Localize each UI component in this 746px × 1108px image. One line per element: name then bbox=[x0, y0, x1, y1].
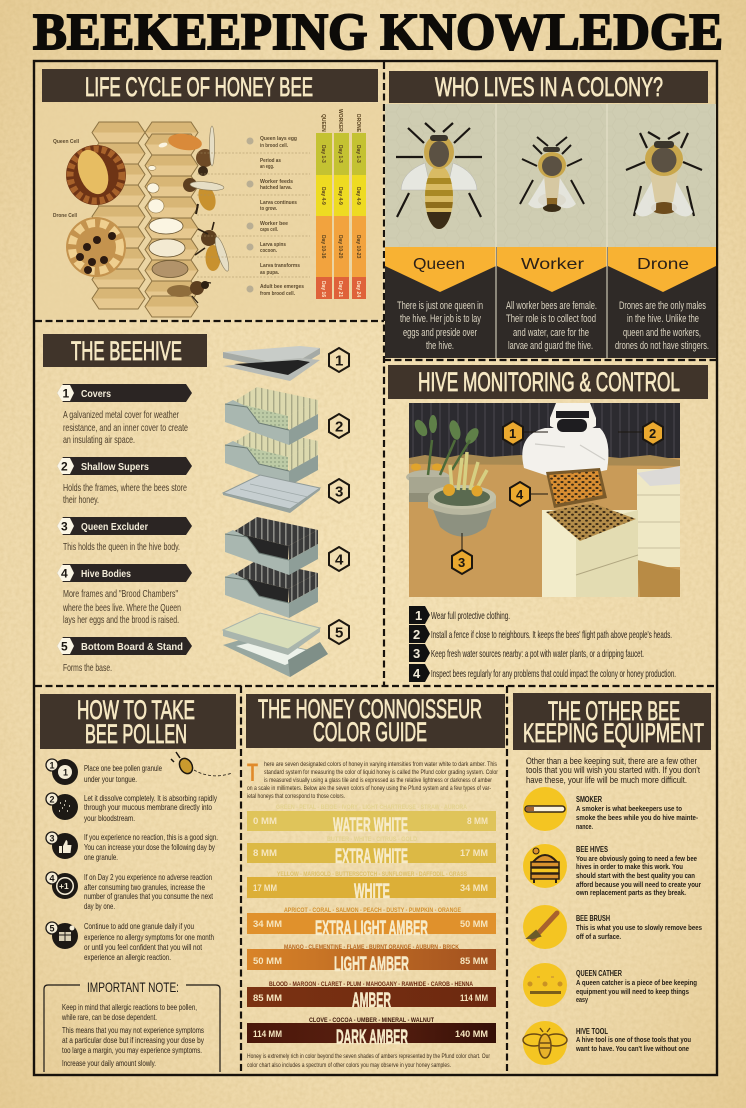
panel: hive monitoring and control bbox=[388, 365, 708, 682]
intro paragraph: T bbox=[247, 759, 258, 787]
band: light amber: LIGHT AMBER bbox=[334, 953, 409, 976]
heading: other equipment bbox=[513, 693, 711, 750]
step 4: day by one. bbox=[84, 901, 115, 911]
hive number badges: 4 bbox=[335, 552, 344, 568]
step 4: If on Day 2 you experience no adverse reaction bbox=[84, 872, 212, 882]
item: bee hives: should start with the best quality you can bbox=[576, 871, 695, 880]
band: amber: AMBER bbox=[352, 989, 391, 1012]
step 1 bbox=[46, 759, 162, 785]
item: bee hives: own replacement parts as they break. bbox=[576, 888, 686, 897]
step 2: 2 bbox=[413, 627, 420, 642]
footnote: color chart also includes a spectrum of other colors you may observe in your honey samples. bbox=[247, 1062, 451, 1069]
important note box: at a particular dose but if increasing your dose by bbox=[62, 1035, 205, 1045]
timeline bars: DRONE bbox=[355, 114, 361, 133]
band: dark amber: 114 MM bbox=[253, 1029, 282, 1040]
timeline bars: QUEEN bbox=[320, 114, 326, 132]
footnote: Honey is extremely rich in color beyond the seven shades of ambers represented by the Pfund color chart. Our bbox=[247, 1053, 491, 1060]
item: bottom board and stand bbox=[57, 637, 192, 674]
caption: drone: Drones are the only males bbox=[619, 300, 706, 312]
item: covers: A galvanized metal cover for weather bbox=[63, 409, 179, 421]
stages list: in brood cell. bbox=[260, 143, 288, 149]
band: amber: 85 MM bbox=[253, 993, 282, 1004]
icon: flying bee bbox=[171, 752, 232, 776]
important note box: while rare, can be dose dependent. bbox=[61, 1012, 157, 1022]
band: extra white: EXTRA WHITE bbox=[335, 845, 408, 868]
step 3 bbox=[409, 644, 644, 662]
item: queen excluder: 3 bbox=[61, 520, 68, 534]
item: bee hives: You are obviously going to need a few bee bbox=[576, 854, 697, 863]
caption: queen bbox=[397, 256, 483, 352]
band: amber: BLOOD - MAROON - CLARET - PLUM - MAHOGANY - RAWHIDE - CAROB - HENNA bbox=[269, 981, 473, 988]
band: dark amber: 140 MM bbox=[455, 1029, 488, 1040]
step 2 bbox=[46, 793, 218, 823]
step 3: You can increase your dose the following day by bbox=[84, 842, 215, 852]
badge 1 bbox=[503, 421, 548, 445]
step 5: experience an allergic reaction. bbox=[84, 952, 171, 962]
timeline bars: Day 1-3 bbox=[337, 145, 343, 163]
item: covers bbox=[57, 384, 192, 446]
timeline bars: Day 10-20 bbox=[337, 235, 343, 259]
stages list: as pupa. bbox=[260, 270, 279, 276]
band: white: WHITE bbox=[354, 880, 390, 903]
timeline bars: Day 16 bbox=[320, 281, 326, 297]
badge 3 bbox=[452, 533, 472, 574]
timeline bars: Day 24 bbox=[355, 281, 361, 297]
step 3 bbox=[46, 832, 218, 862]
item: shallow supers: Shallow Supers bbox=[81, 462, 149, 473]
stages list: to grow. bbox=[260, 206, 277, 212]
step 1: under your tongue. bbox=[84, 774, 137, 784]
caption: worker: Their role is to collect food bbox=[506, 313, 596, 325]
timeline bars: Day 1-3 bbox=[355, 145, 361, 163]
hive number badges: 2 bbox=[335, 418, 343, 436]
step 5: Continue to add one granule daily if you bbox=[84, 921, 194, 931]
important note box: IMPORTANT NOTE: bbox=[87, 979, 179, 995]
item: covers: Covers bbox=[81, 389, 111, 400]
caption: drone: Drone bbox=[637, 256, 689, 273]
item: bottom board and stand: Bottom Board & Stand bbox=[81, 642, 183, 653]
step 2: your bloodstream. bbox=[84, 813, 135, 823]
step 2: 2 bbox=[50, 794, 55, 804]
heading: life cycle: LIFE CYCLE OF HONEY BEE bbox=[85, 72, 313, 102]
beekeeper bbox=[522, 403, 608, 480]
item: shallow supers: Holds the frames, where the bees store bbox=[63, 482, 187, 494]
intro text: Other than a bee keeping suit, there are a few other bbox=[526, 756, 697, 767]
item: hive tool bbox=[523, 1021, 691, 1065]
step 5: or until you feel confident that you will not bbox=[84, 942, 202, 952]
item: hive bodies: More frames and "Brood Chambers" bbox=[63, 588, 178, 600]
intro paragraph: on a scale in millimeters. Below are the seven colors of honey using the Pfund system and a few types of var- bbox=[247, 785, 491, 792]
caption: worker bbox=[506, 256, 597, 352]
step 3: one granule. bbox=[84, 852, 118, 862]
stages list: Larva transforms bbox=[260, 263, 300, 269]
timeline bars: Day 21 bbox=[337, 281, 343, 297]
caption: queen: the hive. Her job is to lay bbox=[400, 313, 481, 325]
heading: honey connoisseur: COLOR GUIDE bbox=[313, 717, 427, 747]
item: hive bodies: where the bees live. Where the Queen bbox=[62, 602, 181, 614]
item: hive tool: want to have. You can't live without one bbox=[575, 1044, 689, 1053]
timeline bars: Day 4-9 bbox=[337, 187, 343, 205]
intro paragraph bbox=[247, 759, 499, 800]
step 1: 1 bbox=[415, 608, 422, 623]
stages list: Period as bbox=[260, 158, 281, 164]
stages list: cocoon. bbox=[260, 248, 277, 254]
item: hive bodies: Hive Bodies bbox=[81, 569, 131, 580]
step 5 bbox=[46, 921, 214, 962]
hive number badges: 3 bbox=[335, 484, 343, 500]
caption: drone: queen and the workers, bbox=[623, 327, 701, 339]
heading: how to take bee pollen: BEE POLLEN bbox=[85, 719, 187, 749]
band: extra light amber: 34 MM bbox=[253, 919, 282, 930]
timeline bars bbox=[316, 109, 366, 299]
band: extra white bbox=[247, 836, 496, 868]
caption: drone bbox=[615, 256, 709, 352]
illustration: queen cell close-up bbox=[66, 145, 126, 205]
item: bee hives: BEE HIVES bbox=[576, 845, 608, 854]
hive part 1: covers bbox=[223, 346, 320, 381]
plant: back pot bbox=[406, 415, 481, 502]
item: hive bodies: 4 bbox=[61, 566, 68, 580]
step 4 bbox=[46, 872, 213, 911]
hive part 3: queen excluder bbox=[223, 475, 320, 513]
badge 3: 3 bbox=[458, 555, 465, 570]
item: bee brush: This is what you use to slowly remove bees bbox=[576, 923, 702, 932]
band: dark amber bbox=[247, 1017, 496, 1049]
badge 4: 4 bbox=[516, 487, 524, 502]
item: bottom board and stand: 5 bbox=[61, 640, 68, 654]
hive part 2: shallow supers bbox=[225, 387, 318, 486]
step 3: 3 bbox=[50, 834, 55, 844]
band: extra white: 8 MM bbox=[253, 848, 277, 859]
item: smoker: SMOKER bbox=[576, 795, 602, 804]
step 1 bbox=[409, 606, 510, 624]
intro paragraph: here are seven designated colors of honey in varying intensities from water white to dark amber. This bbox=[264, 761, 497, 768]
item: bee brush: BEE BRUSH bbox=[576, 914, 610, 923]
stages list: Queen lays egg bbox=[260, 136, 298, 142]
panel: other bee keeping equipment bbox=[513, 693, 711, 1065]
item: smoker: smoke the bees while you do hive mainte- bbox=[576, 813, 698, 822]
step 4: 4 bbox=[50, 874, 55, 884]
band: water white: GREEN - PETAL - BEIGE - IVORY - LIGHT CHARTREUSE - STRAW - AURORA bbox=[276, 804, 467, 811]
item: hive tool: A hive tool is one of those tools that you bbox=[576, 1035, 691, 1044]
band: light amber: MANGO - CLEMENTINE - FLAME - BURNT ORANGE - AUBURN - BRICK bbox=[284, 944, 459, 951]
stages list: Larva continues bbox=[260, 200, 297, 206]
illustration: bees on comb bbox=[167, 126, 231, 303]
item: bottom board and stand: Forms the base. bbox=[63, 662, 112, 674]
step 2 bbox=[409, 625, 672, 643]
band: white: 17 MM bbox=[253, 883, 277, 894]
band: water white: WATER WHITE bbox=[333, 814, 408, 837]
band: white: YELLOW - MARIGOLD - BUTTERSCOTCH - SUNFLOWER - DAFFODIL - GRASS bbox=[277, 871, 467, 878]
panel: life cycle of honey bee bbox=[36, 69, 382, 319]
badge 2 bbox=[618, 421, 663, 445]
step 1: 1 bbox=[50, 760, 55, 770]
step 5: experience no allergy symptoms for one month bbox=[84, 932, 214, 942]
item: smoker: A smoker is what beekeepers use to bbox=[576, 804, 682, 813]
bee: queen bbox=[396, 123, 482, 230]
stages list: caps cell. bbox=[260, 227, 278, 233]
item: covers: an insulating air space. bbox=[63, 434, 135, 446]
item: queen excluder: This holds the queen in the hive body. bbox=[63, 541, 180, 553]
right hive bbox=[637, 466, 680, 597]
heading: the beehive bbox=[43, 334, 207, 367]
hive number badges: 1 bbox=[335, 352, 343, 370]
timeline bars: Day 4-9 bbox=[355, 187, 361, 205]
panel: honey color guide bbox=[246, 694, 505, 1069]
step 2: Let it dissolve completely. It is absorbing rapidly bbox=[84, 793, 218, 803]
badge 2: 2 bbox=[649, 426, 656, 441]
caption: queen: There is just one queen in bbox=[397, 300, 483, 312]
intro paragraph: is measured visually using a glass tile and is expressed as the relative lightness or darkness of amber bbox=[264, 777, 493, 784]
item: queen catcher: equipment you will need to keep things bbox=[576, 987, 689, 996]
band: water white bbox=[247, 804, 496, 837]
hive number badges: 5 bbox=[335, 624, 343, 642]
step 4: after consuming two granules, increase the bbox=[84, 882, 205, 892]
step 4: +1 bbox=[59, 881, 69, 891]
band: white bbox=[247, 871, 496, 903]
stages list: an egg. bbox=[260, 164, 274, 170]
panel: the beehive bbox=[43, 334, 349, 677]
step 4: 4 bbox=[413, 666, 421, 681]
band: dark amber: CLOVE - COCOA - UMBER - MINERAL - WALNUT bbox=[309, 1017, 434, 1024]
step 5: 5 bbox=[50, 924, 55, 934]
label: drone cell: Drone Cell bbox=[53, 213, 77, 219]
band: amber bbox=[247, 981, 496, 1012]
item: bee hives bbox=[523, 844, 701, 897]
title: BEEKEEPING KNOWLEDGE bbox=[33, 4, 723, 61]
bee: worker bbox=[520, 137, 584, 212]
item: shallow supers: 2 bbox=[61, 460, 68, 474]
important note box: Increase your daily amount slowly. bbox=[62, 1058, 156, 1068]
timeline bars: Day 4-9 bbox=[320, 187, 326, 205]
caption: queen: the hive. bbox=[426, 340, 454, 352]
item: queen excluder bbox=[57, 517, 192, 553]
heading: the beehive: THE BEEHIVE bbox=[71, 336, 182, 366]
illustration: honeycomb cells bbox=[92, 122, 198, 317]
heading: how to take bee pollen: HOW TO TAKE bbox=[77, 695, 195, 725]
stages list bbox=[197, 136, 310, 297]
step 4: number of granules that you consume the next bbox=[84, 891, 213, 901]
heading: honey connoisseur: THE HONEY CONNOISSEUR bbox=[258, 694, 482, 724]
step 2: through your mucous membrane directly into bbox=[84, 802, 212, 812]
item: smoker bbox=[523, 787, 698, 831]
item: hive bodies: lays her eggs and the brood is raised. bbox=[63, 614, 179, 626]
important note box bbox=[44, 979, 220, 1072]
label: queen cell: Queen Cell bbox=[53, 139, 79, 145]
intro paragraph: ietal honeys that correspond to those colors. bbox=[247, 793, 345, 800]
band: light amber: 85 MM bbox=[460, 956, 488, 967]
step 1: Place one bee pollen granule bbox=[84, 763, 162, 773]
important note box: Keep in mind that allergic reactions to bee pollen, bbox=[62, 1002, 197, 1012]
band: light amber: 50 MM bbox=[253, 956, 282, 967]
plant: front pot bbox=[428, 452, 496, 536]
step 1: Wear full protective clothing. bbox=[431, 610, 510, 622]
caption: worker: larvae and guard the hive. bbox=[508, 340, 593, 352]
item: shallow supers: their honey. bbox=[63, 494, 99, 506]
illustration: beekeeper scene bbox=[406, 403, 680, 597]
item: hive tool: HIVE TOOL bbox=[576, 1027, 608, 1036]
timeline bars: Day 10-23 bbox=[355, 235, 361, 259]
bee: drone bbox=[626, 132, 702, 217]
control list bbox=[409, 606, 676, 682]
band: dark amber: DARK AMBER bbox=[336, 1026, 408, 1049]
stages list: hatched larva. bbox=[260, 185, 292, 191]
colony illustration backdrop bbox=[385, 104, 716, 358]
illustration: drone cell close-up bbox=[66, 217, 126, 277]
caption: queen: Queen bbox=[413, 256, 465, 273]
item: bee brush: off of a surface. bbox=[576, 932, 621, 941]
stages list: Worker bee bbox=[260, 221, 288, 227]
timeline bars: WORKER bbox=[337, 109, 343, 132]
stages list: Worker feeds bbox=[260, 179, 293, 185]
item: smoker: nance. bbox=[576, 822, 593, 831]
band: extra light amber: APRICOT - CORAL - SALMON - PEACH - DUSTY - PUMPKIN - ORANGE bbox=[284, 907, 461, 914]
step 3: If you experience no reaction, this is a good sign. bbox=[84, 832, 218, 842]
stages list: Adult bee emerges bbox=[260, 284, 304, 290]
band: extra light amber: 50 MM bbox=[460, 919, 488, 930]
intro text: have these, your life will be much more difficult. bbox=[526, 775, 687, 786]
caption: queen: eggs and preside over bbox=[403, 327, 477, 339]
item: queen catcher: easy bbox=[576, 995, 589, 1004]
stages list: from brood cell. bbox=[260, 291, 295, 297]
item: covers: resistance, and an inner cover to create bbox=[63, 422, 188, 434]
important note box: This means that you may not experience symptoms bbox=[62, 1025, 204, 1035]
caption: worker: Worker bbox=[521, 256, 585, 273]
hive part 5: bottom board and stand bbox=[223, 613, 328, 677]
item: bee hives: hives in order to make this work. You bbox=[576, 862, 683, 871]
intro text bbox=[526, 756, 700, 786]
hive part 4: hive bodies bbox=[225, 517, 318, 618]
stages list: Larva spins bbox=[260, 242, 286, 248]
heading: how to take bee pollen bbox=[40, 694, 236, 749]
step 1: 1 bbox=[63, 768, 68, 778]
band: water white: 8 MM bbox=[467, 816, 488, 827]
item: queen catcher bbox=[523, 963, 697, 1007]
band: extra light amber: EXTRA LIGHT AMBER bbox=[315, 917, 428, 940]
band: extra white: BUTTER - WHITE - CITRUS - GOLD bbox=[327, 836, 417, 843]
panel: how to take bee pollen bbox=[40, 694, 236, 1072]
badge 4 bbox=[510, 482, 548, 506]
item: hive bodies bbox=[57, 564, 192, 626]
item: bee hives: afford because you will need to create your bbox=[576, 880, 701, 889]
caption: worker: All worker bees are female. bbox=[506, 300, 597, 312]
band: water white: 0 MM bbox=[253, 816, 277, 827]
caption: worker: and water, care for the bbox=[513, 327, 589, 339]
panel: who lives in a colony bbox=[385, 71, 716, 358]
timeline bars: Day 10-16 bbox=[320, 235, 326, 259]
caption: drone: in the hive. Unlike the bbox=[627, 313, 699, 325]
timeline bars: Day 1-3 bbox=[320, 145, 326, 163]
item: covers: 1 bbox=[62, 386, 70, 400]
intro text: tools that you will wish you started with. If you don't bbox=[526, 765, 700, 776]
band: extra white: 17 MM bbox=[460, 848, 488, 859]
band: extra light amber bbox=[247, 907, 496, 940]
hive number badges bbox=[329, 348, 349, 644]
important note box: too large a margin, you may experience symptoms. bbox=[62, 1045, 202, 1055]
item: queen catcher: A queen catcher is a piece of bee keeping bbox=[576, 978, 697, 987]
item: queen excluder: Queen Excluder bbox=[81, 522, 148, 533]
band: amber: 114 MM bbox=[460, 993, 488, 1004]
heading: honey connoisseur bbox=[246, 694, 505, 748]
open hive bbox=[542, 503, 638, 597]
step 4 bbox=[409, 664, 676, 682]
intro paragraph: standard system for measuring the color of liquid honey is called the Pfund color grading system. Color bbox=[264, 769, 499, 776]
item: bee brush bbox=[523, 905, 702, 949]
item: shallow supers bbox=[57, 457, 192, 506]
step 3: 3 bbox=[413, 646, 420, 661]
colony caption bands bbox=[385, 247, 716, 358]
band: light amber bbox=[247, 944, 496, 976]
item: queen catcher: QUEEN CATHER bbox=[576, 969, 622, 978]
badge 1: 1 bbox=[509, 426, 516, 441]
heading: life cycle bbox=[42, 69, 378, 102]
band: white: 34 MM bbox=[460, 883, 488, 894]
footnote bbox=[247, 1053, 491, 1069]
frame with bees bbox=[546, 468, 607, 508]
